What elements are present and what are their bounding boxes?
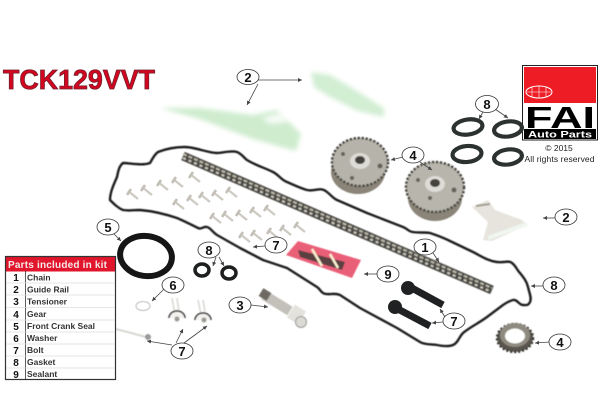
label 7 flange bolts: 7 xyxy=(450,314,458,329)
copyright: All rights reserved xyxy=(524,154,595,164)
table rows: 5 xyxy=(13,322,19,333)
label 2 with arrows to green rails xyxy=(237,70,302,105)
table rows: 2 xyxy=(13,285,19,296)
copyright xyxy=(524,143,595,164)
table rows: 9 xyxy=(13,370,19,381)
small bolts xyxy=(127,172,305,242)
cam gear left xyxy=(331,138,388,194)
table rows: Guide Rail xyxy=(27,284,69,294)
table rows: Washer xyxy=(27,333,58,343)
label 4 cams: 4 xyxy=(409,148,417,163)
label 3: 3 xyxy=(236,298,244,313)
label 7 lower xyxy=(147,326,207,359)
FAI logo: FAI xyxy=(525,100,595,135)
small gasket rings xyxy=(195,264,236,279)
flange bolts xyxy=(388,281,443,326)
front crank seal xyxy=(117,233,175,279)
label 6: 6 xyxy=(169,278,177,293)
small washer bolts xyxy=(169,298,211,322)
table rows xyxy=(13,272,95,381)
label 7 lower: 7 xyxy=(178,344,186,359)
table rows: 3 xyxy=(13,297,19,308)
label 2 right: 2 xyxy=(562,210,570,225)
label 8 gaskets: 8 xyxy=(483,97,491,112)
FAI logo xyxy=(522,66,598,140)
table rows: 1 xyxy=(13,273,19,284)
label 4 sprocket: 4 xyxy=(556,335,564,350)
label 4 sprocket xyxy=(535,334,571,350)
label 9: 9 xyxy=(384,267,392,282)
table rows: Front Crank Seal xyxy=(27,321,95,331)
crank sprocket xyxy=(497,323,533,352)
label 3 xyxy=(229,297,268,313)
table rows: Chain xyxy=(27,272,51,282)
tensioner guide rail xyxy=(472,200,527,241)
label 7 flange bolts xyxy=(432,309,465,329)
parts table xyxy=(6,256,116,381)
cover gasket xyxy=(110,147,531,346)
label 8 gasket xyxy=(531,277,565,293)
title: TCK129VVT xyxy=(3,64,155,95)
table rows: 4 xyxy=(13,310,19,321)
table rows: Sealant xyxy=(27,369,57,379)
guide rail: long green xyxy=(160,108,301,151)
label 9 xyxy=(364,266,399,282)
label 1 xyxy=(414,239,439,262)
cam gear right xyxy=(406,162,464,221)
tensioner xyxy=(261,292,306,328)
FAI logo: Auto Parts xyxy=(528,130,592,140)
guide rail: upper green xyxy=(311,72,384,117)
label 2 with arrows to green rails: 2 xyxy=(244,70,252,85)
label 5: 5 xyxy=(104,220,112,235)
table header: Parts included in kit xyxy=(8,260,108,271)
table rows: Tensioner xyxy=(27,296,68,306)
side bolt xyxy=(116,329,151,340)
label 1: 1 xyxy=(421,240,429,255)
timing chain xyxy=(183,154,492,292)
table rows: 8 xyxy=(13,358,19,369)
table rows: Gear xyxy=(27,309,47,319)
table rows: Gasket xyxy=(27,357,56,367)
label 5 xyxy=(97,219,121,241)
label 8 gaskets xyxy=(476,96,508,119)
label 6 xyxy=(152,277,184,301)
sealant tube xyxy=(286,241,361,278)
label 7 small bolts: 7 xyxy=(272,238,280,253)
label 7 small bolts xyxy=(253,237,287,253)
label 2 right xyxy=(543,209,577,225)
label 4 cams xyxy=(391,147,432,170)
copyright: © 2015 xyxy=(545,143,573,153)
washer xyxy=(136,302,150,310)
table rows: Bolt xyxy=(27,345,44,355)
table rows: 6 xyxy=(13,334,19,345)
label 8 small gaskets xyxy=(198,242,224,266)
gaskets group xyxy=(452,118,523,166)
label 8 gasket: 8 xyxy=(550,278,558,293)
label 8 small gaskets: 8 xyxy=(205,243,213,258)
table rows: 7 xyxy=(13,346,19,357)
